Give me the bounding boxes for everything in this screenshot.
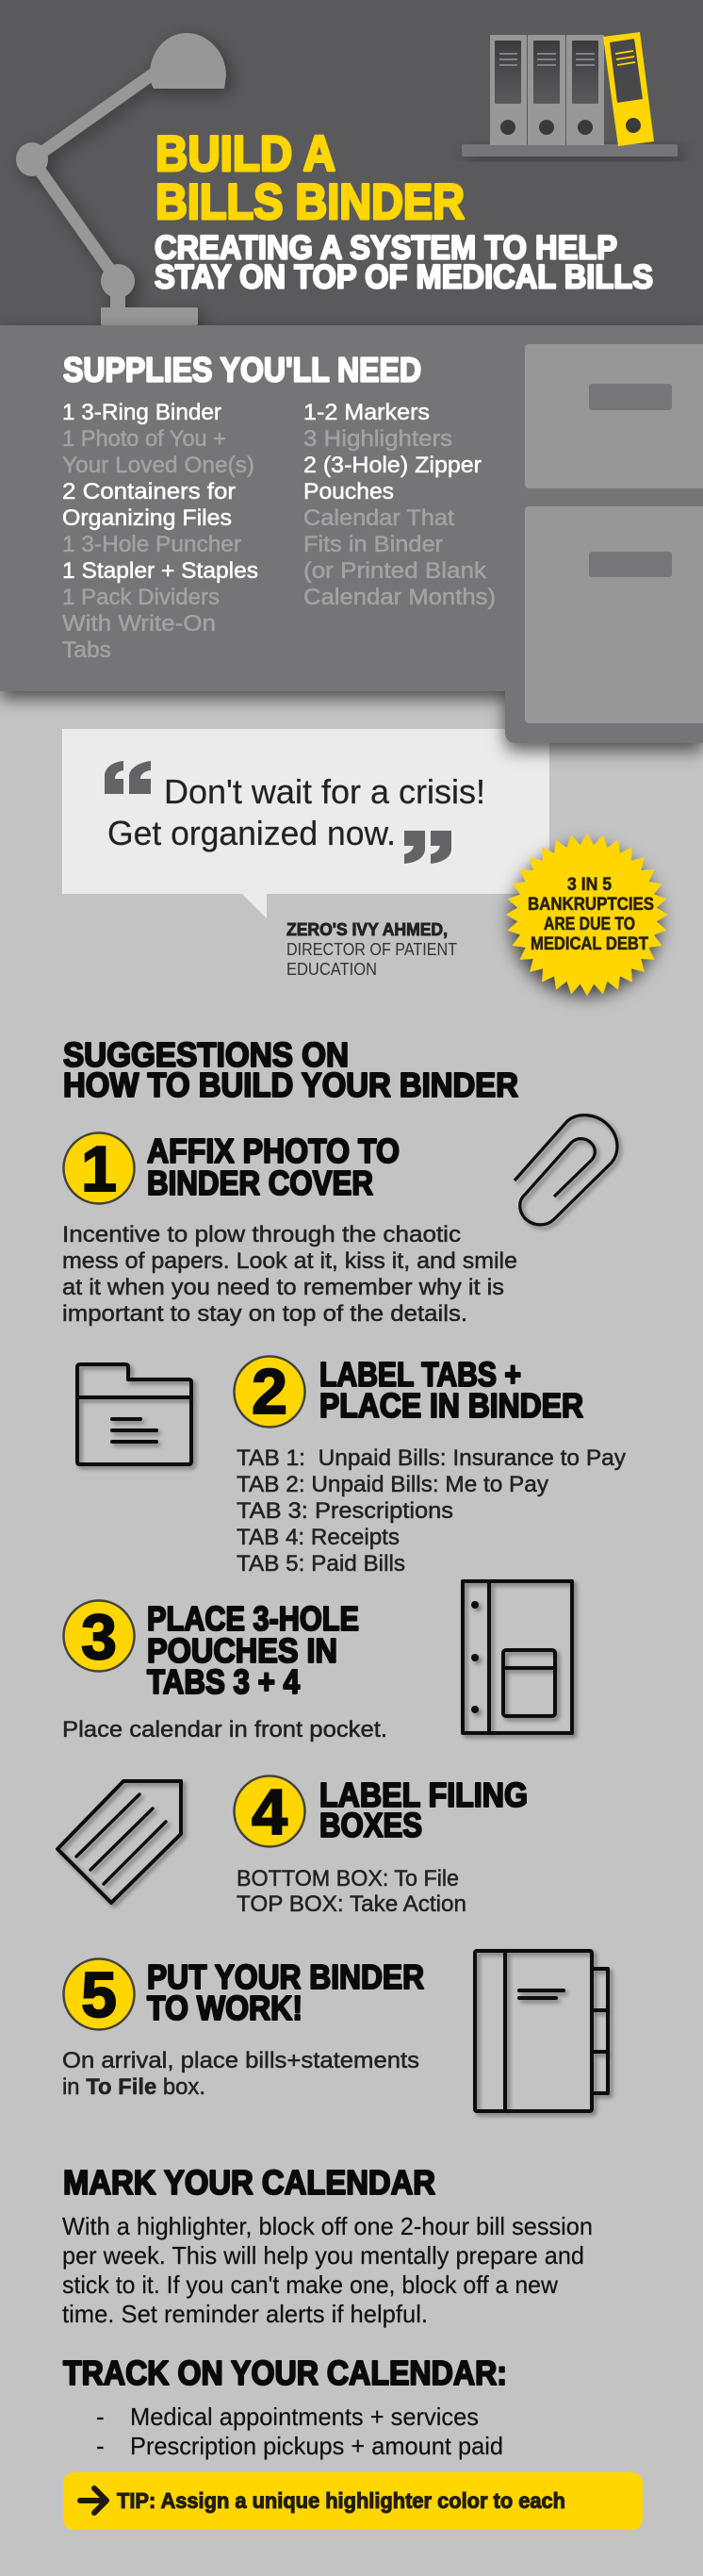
number badge 1 — [64, 1133, 134, 1205]
step 3 heading: POUCHES IN — [147, 1631, 337, 1670]
supplies list column 2: Pouches — [303, 479, 394, 504]
step 5 text: On arrival, place bills+statements — [62, 2048, 419, 2073]
panel: header — [0, 0, 703, 325]
step 2 heading: PLACE IN BINDER — [319, 1386, 583, 1425]
step 4 text — [237, 1866, 466, 1917]
step 1 — [62, 1115, 617, 1327]
tab list: TAB 1: Unpaid Bills: Insurance to Pay — [237, 1445, 626, 1471]
drawer 1 — [525, 344, 703, 488]
tab list: TAB 4: Receipts — [237, 1525, 400, 1550]
icon: arrow — [80, 2488, 106, 2513]
icon: folder — [77, 1364, 191, 1464]
step 1 text — [62, 1222, 517, 1327]
callout: starburst statistic: BANKRUPTCIES — [528, 895, 654, 915]
calendar text: With a highlighter, block off one 2-hour bill session — [62, 2212, 593, 2240]
heading: supplies: SUPPLIES YOU'LL NEED — [63, 351, 421, 388]
tracking list: Medical appointments + services — [130, 2403, 479, 2431]
step 5 heading: TO WORK! — [147, 1989, 302, 2027]
supplies list column 2: 2 (3-Hole) Zipper — [303, 453, 482, 478]
step 5 text — [62, 2048, 419, 2100]
icon: close quote — [404, 831, 451, 864]
step 5 heading — [147, 1957, 424, 2027]
supplies list column 1: 1 Stapler + Staples — [62, 558, 258, 584]
panel: quote — [62, 729, 549, 979]
binder 4: yellow tilted — [603, 32, 654, 146]
supplies list column 1: 1 3-Ring Binder — [62, 400, 221, 425]
subtitle — [155, 230, 653, 296]
tab list — [237, 1445, 626, 1577]
number badge 1: 1 — [81, 1133, 117, 1205]
icon: binder page with pouch — [463, 1581, 572, 1733]
calendar text: time. Set reminder alerts if helpful. — [62, 2300, 428, 2328]
callout: starburst statistic — [506, 834, 668, 996]
supplies list column 1: Your Loved One(s) — [62, 453, 254, 478]
step 5 heading: PUT YOUR BINDER — [147, 1957, 424, 1996]
tracking list — [96, 2403, 503, 2460]
heading: suggestions — [63, 1035, 518, 1104]
number badge 2 — [234, 1356, 305, 1428]
step 2 — [77, 1355, 626, 1577]
supplies list column 1: Organizing Files — [62, 505, 232, 531]
step 1 text: at it when you need to remember why it is — [62, 1275, 504, 1300]
step 4 — [57, 1775, 528, 1917]
supplies list column 1: Tabs — [62, 637, 111, 663]
quote text: Get organized now. — [107, 814, 396, 852]
step 4 heading: LABEL FILING — [319, 1775, 528, 1814]
supplies list column 2: (or Printed Blank — [303, 558, 487, 584]
step 5 — [62, 1951, 608, 2111]
tracking list: Prescription pickups + amount paid — [130, 2432, 503, 2460]
step 3 heading: TABS 3 + 4 — [147, 1662, 300, 1701]
tab list: TAB 2: Unpaid Bills: Me to Pay — [237, 1472, 548, 1497]
cabinet and panel background — [0, 325, 703, 743]
supplies list column 2: 1-2 Markers — [303, 400, 430, 425]
section: track on your calendar — [63, 2353, 507, 2460]
tracking list: - — [96, 2432, 105, 2460]
supplies list column 1: 2 Containers for — [62, 479, 236, 504]
step 1 text: mess of papers. Look at it, kiss it, and smile — [62, 1248, 517, 1274]
heading: track: TRACK ON YOUR CALENDAR: — [63, 2353, 507, 2392]
supplies list column 2: Calendar Months) — [303, 585, 496, 610]
icon: binders on shelf — [462, 32, 678, 157]
callout: starburst statistic: ARE DUE TO — [544, 915, 635, 934]
step 1 text: important to stay on top of the details. — [62, 1301, 467, 1327]
step 3 heading — [147, 1599, 359, 1701]
step 5 text: in To File box. — [62, 2074, 205, 2100]
calendar text — [62, 2212, 593, 2328]
drawer 2 — [525, 506, 703, 723]
title: BUILD A — [155, 126, 335, 182]
icon: label tag — [57, 1781, 181, 1903]
tab list: TAB 5: Paid Bills — [237, 1551, 405, 1577]
supplies list column 2: Calendar That — [303, 505, 454, 531]
speech bubble — [62, 729, 549, 918]
step 4 text: BOTTOM BOX: To File — [237, 1866, 459, 1891]
supplies list column 2: 3 Highlighters — [303, 426, 452, 452]
supplies list column 1 — [62, 400, 258, 663]
number badge 5 — [64, 1959, 134, 2031]
attribution: DIRECTOR OF PATIENT — [286, 940, 457, 959]
shelf — [462, 144, 678, 157]
quote text: Don't wait for a crisis! — [164, 772, 485, 811]
number badge 3 — [64, 1601, 134, 1673]
quote text — [107, 772, 485, 852]
step 4 text: TOP BOX: Take Action — [237, 1891, 466, 1917]
callout: starburst statistic: 3 IN 5 — [567, 875, 612, 895]
attribution: EDUCATION — [286, 960, 377, 979]
attribution: ZERO'S IVY AHMED, — [286, 920, 448, 939]
heading: mark your calendar: MARK YOUR CALENDAR — [63, 2163, 435, 2202]
supplies list column 1: 1 Pack Dividers — [62, 585, 220, 610]
number badge 5: 5 — [81, 1959, 117, 2031]
binder 1 — [490, 35, 527, 145]
heading: suggestions: SUGGESTIONS ON — [63, 1035, 349, 1074]
section: mark your calendar — [62, 2163, 593, 2328]
title: BILLS BINDER — [155, 174, 465, 230]
icon: desk lamp — [16, 33, 226, 325]
tip text: TIP: Assign a unique highlighter color to each — [117, 2488, 565, 2513]
step 1 heading: BINDER COVER — [147, 1164, 373, 1202]
subtitle: STAY ON TOP OF MEDICAL BILLS — [155, 258, 653, 296]
binder 2 — [528, 35, 565, 145]
calendar text: per week. This will help you mentally prepare and — [62, 2241, 584, 2270]
supplies list column 1: 1 3-Hole Puncher — [62, 532, 241, 557]
heading: suggestions: HOW TO BUILD YOUR BINDER — [63, 1065, 518, 1104]
binder 3 — [566, 35, 604, 145]
step 3 text: Place calendar in front pocket. — [62, 1717, 387, 1742]
step 1 heading: AFFIX PHOTO TO — [147, 1131, 400, 1170]
step 4 heading: BOXES — [319, 1806, 422, 1844]
subtitle: CREATING A SYSTEM TO HELP — [155, 230, 617, 266]
icon: paperclip — [515, 1115, 617, 1225]
supplies list column 1: 1 Photo of You + — [62, 426, 226, 452]
attribution — [286, 920, 457, 979]
tracking list: - — [96, 2403, 105, 2431]
step 1 heading — [147, 1131, 400, 1202]
number badge 2: 2 — [252, 1356, 287, 1428]
icon: open quote — [105, 761, 151, 794]
tab list: TAB 3: Prescriptions — [237, 1498, 453, 1524]
step 3 heading: PLACE 3-HOLE — [147, 1599, 359, 1638]
step 3 — [62, 1581, 572, 1742]
calendar text: stick to it. If you can't make one, block off a new — [62, 2271, 558, 2299]
number badge 3: 3 — [81, 1601, 117, 1673]
number badge 4: 4 — [252, 1776, 287, 1848]
step 2 heading — [319, 1355, 583, 1425]
supplies list column 2 — [303, 400, 496, 610]
panel: supplies with filing cabinet — [0, 325, 703, 743]
supplies list column 2: Fits in Binder — [303, 532, 443, 557]
callout: tip — [63, 2472, 643, 2530]
title — [155, 126, 465, 230]
callout: starburst statistic: MEDICAL DEBT — [531, 934, 648, 954]
icon: binder with tabs — [475, 1951, 608, 2111]
number badge 4 — [234, 1776, 305, 1848]
supplies list column 1: With Write-On — [62, 611, 216, 636]
step 2 heading: LABEL TABS + — [319, 1355, 521, 1394]
step 1 text: Incentive to plow through the chaotic — [62, 1222, 461, 1247]
step 4 heading — [319, 1775, 528, 1844]
